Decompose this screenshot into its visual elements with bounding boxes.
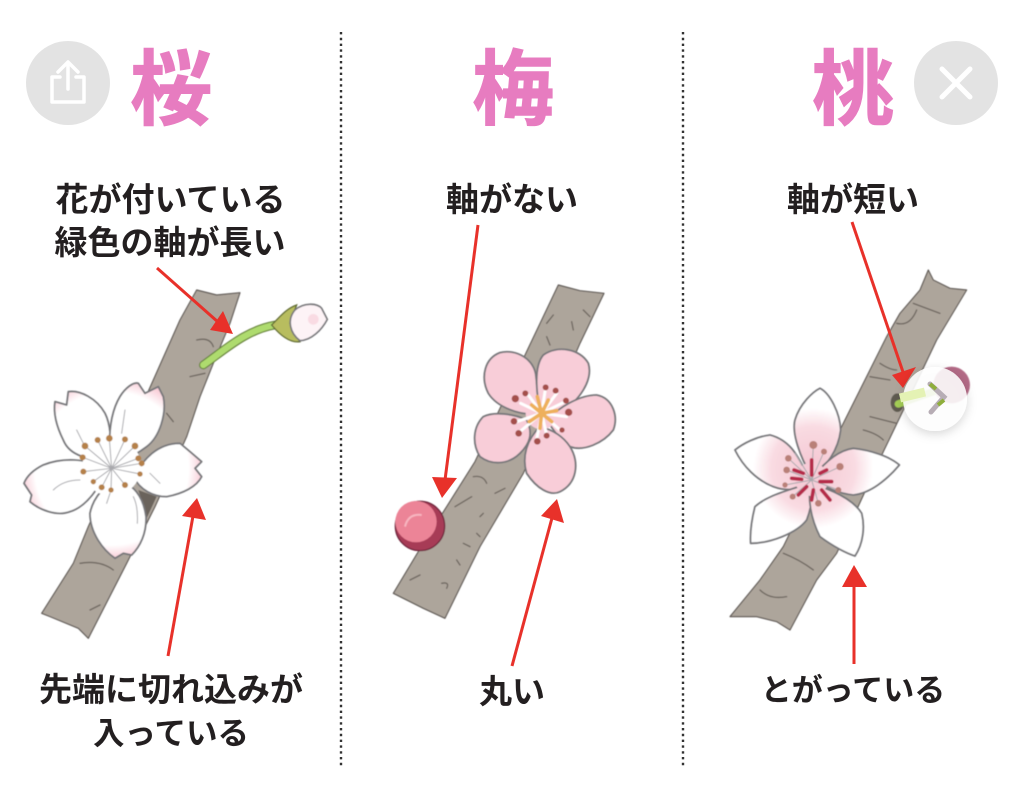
column divider left xyxy=(340,32,342,768)
petals xyxy=(484,352,540,414)
label: no stem: 軸がない xyxy=(446,181,578,218)
label: round: 丸い xyxy=(479,673,545,710)
calyx xyxy=(272,305,300,342)
petals xyxy=(55,391,111,460)
branch xyxy=(393,285,604,618)
label: long green stem: 花が付いている xyxy=(55,181,286,218)
share button xyxy=(26,41,110,125)
arrow: to short stem xyxy=(852,222,916,388)
ume bud xyxy=(395,501,445,551)
branch xyxy=(42,290,240,638)
bark marks xyxy=(760,303,940,597)
arrow: to stem xyxy=(157,268,233,334)
panel: sakura xyxy=(24,45,327,751)
illustration: momo branch and flower xyxy=(730,270,970,630)
dark shadow on branch xyxy=(138,490,157,518)
arrow: to bud xyxy=(432,225,478,498)
panel: momo xyxy=(730,45,970,708)
icon: close xyxy=(942,69,970,97)
branch xyxy=(730,270,967,630)
icon: share xyxy=(52,62,84,102)
green stem xyxy=(203,325,275,365)
arrow: to pointed petal xyxy=(842,565,867,664)
stem socket xyxy=(891,393,904,412)
label: short stem: 軸が短い xyxy=(787,181,919,218)
title: ume: 梅 xyxy=(472,45,554,136)
next button overlay xyxy=(900,367,967,431)
illustration: sakura branch and flower xyxy=(24,290,327,638)
bark marks xyxy=(410,310,590,588)
flower centre xyxy=(795,463,828,496)
bark marks xyxy=(80,339,213,610)
stamens xyxy=(53,410,160,523)
bud xyxy=(290,304,327,341)
momo bud xyxy=(933,367,970,403)
label: notched tips: 先端に切れ込みが xyxy=(39,671,303,708)
arrow: to petal tip xyxy=(168,498,206,656)
panel: ume xyxy=(393,45,615,710)
flower centre xyxy=(526,397,558,429)
title: sakura: 桜 xyxy=(130,45,212,136)
arrow: to round petal xyxy=(512,499,564,666)
petals xyxy=(794,388,841,477)
label: long green stem: 緑色の軸が長い xyxy=(54,224,286,261)
illustration: ume branch and flower xyxy=(393,285,615,618)
label: pointed: とがっている xyxy=(761,673,945,708)
column divider right xyxy=(682,32,684,768)
title: momo: 桃 xyxy=(812,45,894,136)
close button xyxy=(914,41,998,125)
stamens xyxy=(785,445,840,503)
flower centre xyxy=(82,437,141,496)
label: notched tips: 入っている xyxy=(93,715,249,751)
